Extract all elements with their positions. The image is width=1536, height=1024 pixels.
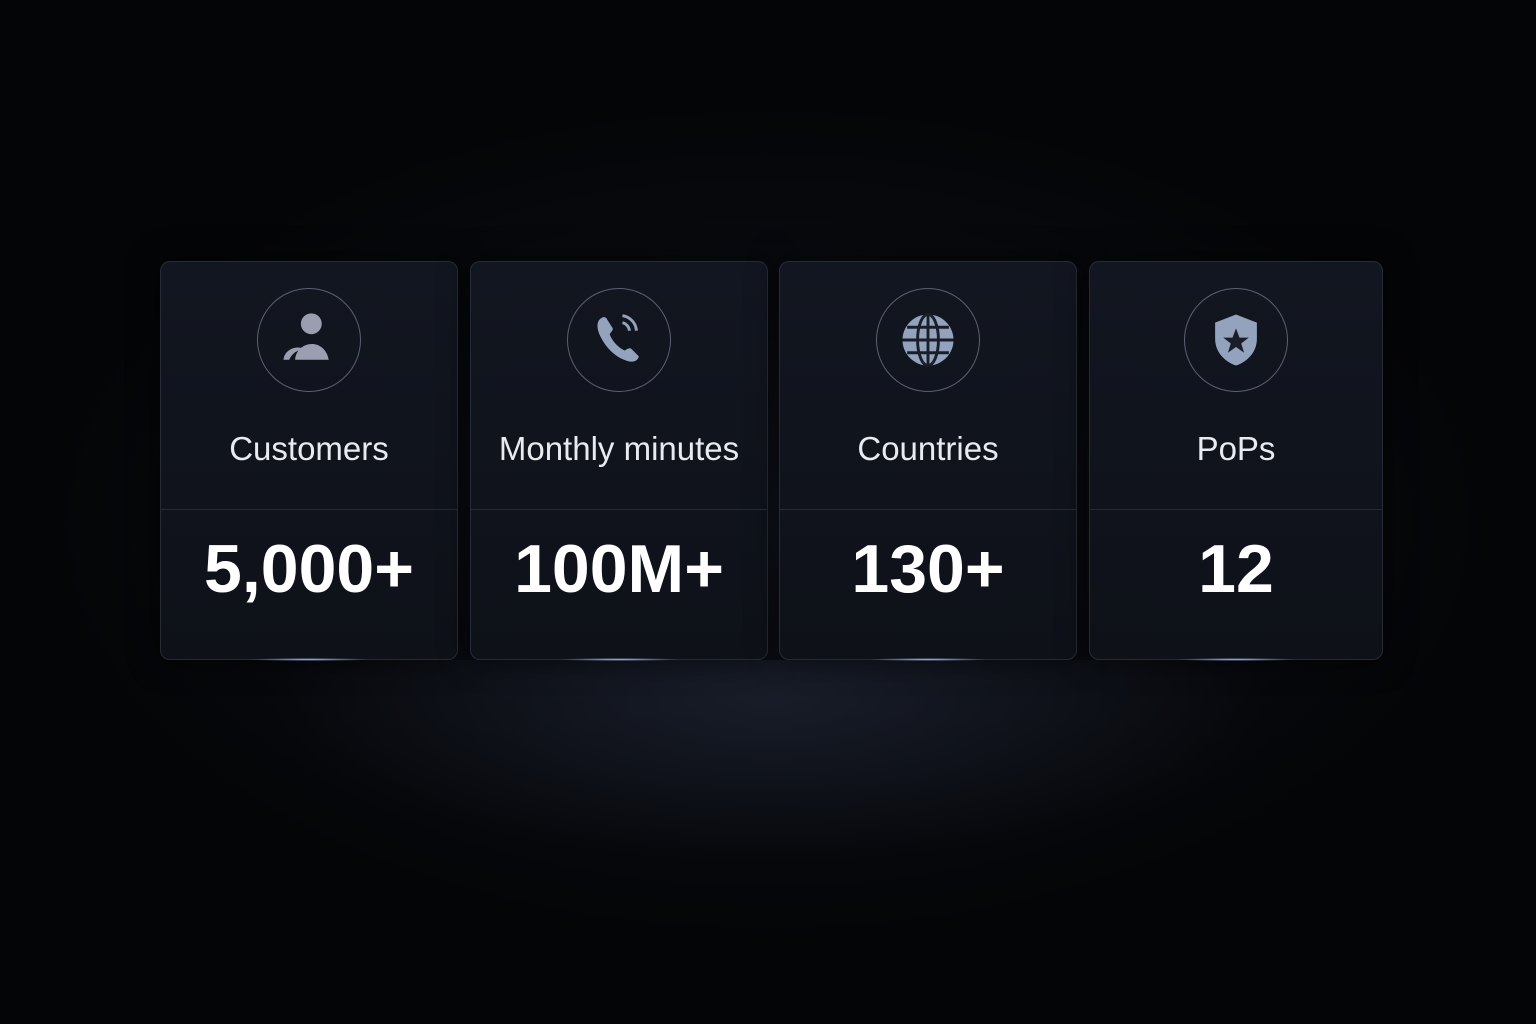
label: Countries	[857, 430, 999, 467]
value: 130+	[851, 531, 1005, 607]
card: countries	[779, 261, 1077, 660]
icon: phone	[567, 288, 671, 392]
label: Customers	[229, 430, 389, 467]
card: monthly minutes	[470, 261, 768, 660]
card: customers	[160, 261, 458, 660]
label: Monthly minutes	[499, 430, 739, 467]
icon: globe	[876, 288, 980, 392]
value: 100M+	[514, 531, 724, 607]
card: pops	[1089, 261, 1383, 660]
value: 5,000+	[204, 531, 414, 607]
icon: shield	[1184, 288, 1288, 392]
icon: customer	[257, 288, 361, 392]
value: 12	[1198, 531, 1274, 607]
label: PoPs	[1197, 430, 1275, 467]
